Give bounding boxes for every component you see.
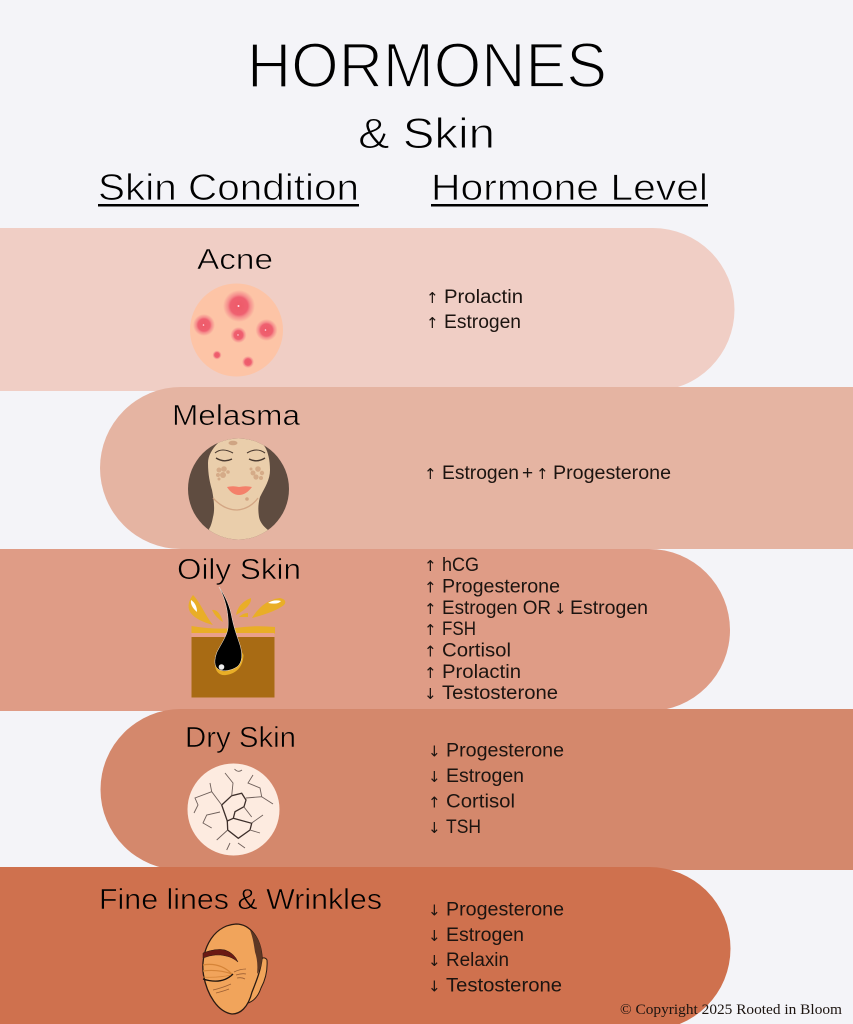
icon: face with melasma [188, 438, 289, 540]
hormone list: oily skin: hCG [442, 555, 479, 576]
hormone list: fine lines and wrinkles: Testosterone [446, 976, 562, 996]
hormone list: acne: ↑ [426, 289, 439, 307]
hormone list: dry skin [428, 740, 564, 838]
panel: fine lines and wrinkles [0, 867, 730, 1024]
hormone list: oily skin: Estrogen [570, 598, 648, 619]
hormone list: oily skin: ↑ [424, 557, 437, 575]
hormone list: oily skin: Prolactin [442, 662, 521, 683]
hormone list: oily skin: Progesterone [442, 576, 560, 598]
hormone list: melasma: Progesterone [553, 463, 671, 484]
hormone list: melasma [424, 463, 671, 484]
hormone list: oily skin: ↑ [424, 578, 437, 596]
hormone list: acne: Prolactin [444, 287, 523, 308]
hormone list: fine lines and wrinkles [428, 900, 564, 996]
panel: melasma [100, 387, 853, 549]
subtitle: & Skin [358, 110, 495, 158]
panel: dry skin [100, 709, 853, 870]
hormone list: oily skin: ↓ [424, 685, 437, 703]
heading: dry skin: Dry Skin [185, 722, 296, 754]
hormone list: dry skin: ↓ [428, 768, 441, 786]
hormone list: fine lines and wrinkles: ↓ [428, 902, 441, 920]
heading: melasma: Melasma [172, 400, 301, 432]
hormone list: acne: Estrogen [444, 312, 521, 333]
column heading: skin condition: Skin Condition [98, 167, 359, 208]
hormone list: acne: ↑ [426, 314, 439, 332]
hormone list: dry skin: ↓ [428, 819, 441, 837]
icon: acne skin [190, 284, 283, 376]
column heading: hormone level: Hormone Level [431, 167, 708, 208]
icon: oily hair follicle [189, 587, 285, 698]
hormone list: melasma: ↑ [536, 465, 549, 483]
icon: cracked dry skin [188, 764, 280, 856]
heading: acne: Acne [197, 244, 273, 276]
hormone list: dry skin: Cortisol [446, 792, 515, 812]
hormone list: oily skin: ↑ [424, 600, 437, 618]
hormone list: melasma: Estrogen [442, 463, 519, 484]
hormone list: dry skin: TSH [446, 817, 481, 838]
hormone list: oily skin: ↑ [424, 642, 437, 660]
heading: oily skin: Oily Skin [177, 554, 301, 586]
icon: wrinkled face [203, 924, 267, 1014]
hormone list: fine lines and wrinkles: ↓ [428, 927, 441, 945]
hormone list: oily skin: Estrogen OR [442, 598, 551, 619]
heading: fine lines and wrinkles: Fine lines & Wrinkles [99, 884, 382, 916]
hormone list: oily skin: Cortisol [442, 640, 511, 662]
copyright notice: © Copyright 2025 Rooted in Bloom [620, 1002, 843, 1018]
panel: acne [0, 228, 734, 391]
hormone list: oily skin: ↑ [424, 664, 437, 682]
hormone list: melasma: + [522, 463, 533, 484]
hormone list: fine lines and wrinkles: ↓ [428, 952, 441, 970]
hormone list: oily skin [424, 555, 648, 704]
hormone list: fine lines and wrinkles: Relaxin [446, 950, 509, 971]
hormone list: oily skin: ↑ [424, 621, 437, 639]
hormone list: fine lines and wrinkles: Progesterone [446, 900, 564, 920]
hormone list: oily skin: ↓ [554, 600, 567, 618]
hormone list: melasma: ↑ [424, 465, 437, 483]
hormone list: dry skin: Estrogen [446, 766, 524, 787]
title: HORMONES [247, 31, 607, 101]
hormone list: dry skin: ↑ [428, 794, 441, 812]
hormone list: dry skin: ↓ [428, 742, 441, 760]
hormone list: oily skin: Testosterone [442, 683, 558, 704]
hormone list: acne [426, 287, 523, 333]
hormone list: dry skin: Progesterone [446, 740, 564, 762]
hormone list: fine lines and wrinkles: ↓ [428, 978, 441, 996]
hormone list: oily skin: FSH [442, 619, 476, 640]
panel: oily skin [0, 549, 730, 711]
hormone list: fine lines and wrinkles: Estrogen [446, 925, 524, 946]
